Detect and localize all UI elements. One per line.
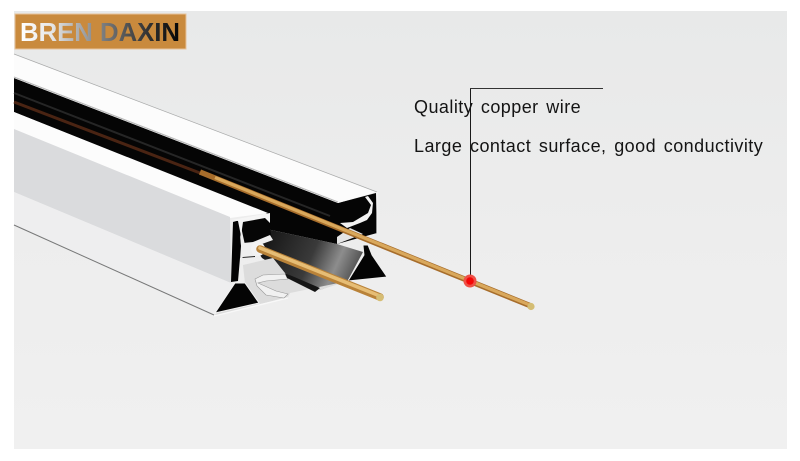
brand badge	[15, 14, 186, 49]
rail: far triangle foot	[348, 245, 387, 281]
track rail	[14, 54, 387, 316]
rail: far inner lip	[337, 228, 363, 244]
rail: front triangle foot	[215, 283, 259, 313]
long copper wire	[14, 102, 535, 310]
short copper wire	[251, 242, 384, 301]
rail: black inner channel	[14, 78, 377, 244]
brand name: BREN DAXIN	[20, 17, 180, 47]
rail: far profile hook	[340, 196, 373, 228]
callout heading: Quality copper wire	[414, 97, 581, 117]
rail: lower white lip	[14, 112, 268, 218]
rail: lower side face	[14, 192, 236, 316]
rail: grey side face	[14, 129, 231, 283]
callout leader line	[470, 88, 603, 281]
rail: base plate with slot	[214, 258, 348, 316]
callout description: Large contact surface, good conductivity	[414, 136, 763, 156]
rail: channel floor	[243, 224, 363, 290]
rail: front profile	[240, 216, 272, 245]
red marker dot	[464, 274, 476, 288]
rail: top white lip	[14, 54, 377, 203]
